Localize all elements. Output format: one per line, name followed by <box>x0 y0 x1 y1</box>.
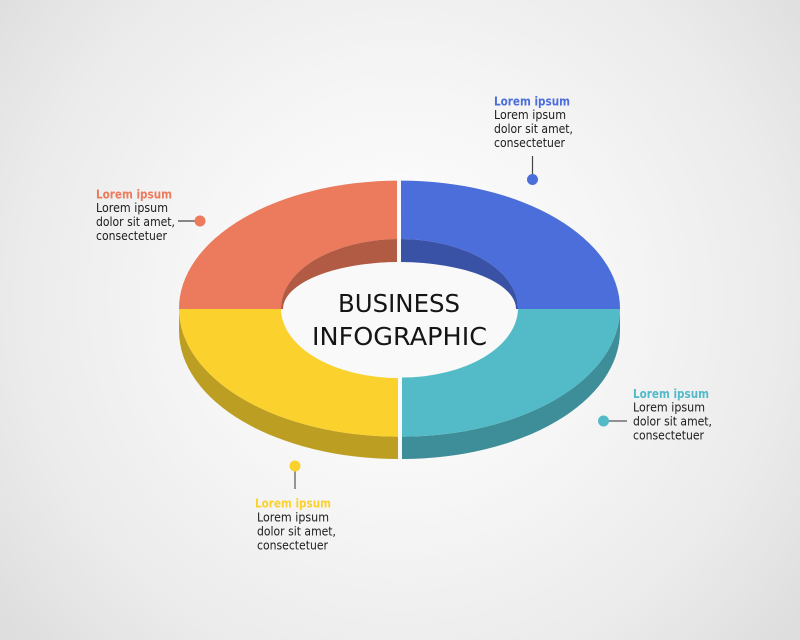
callout: orange: Lorem ipsum <box>96 188 172 202</box>
callout: teal: Lorem ipsum <box>633 400 705 414</box>
segment: teal <box>402 309 620 459</box>
callout: orange: consectetuer <box>96 229 167 243</box>
donut chart <box>179 181 620 459</box>
segment: orange <box>179 181 397 309</box>
callout: teal: consectetuer <box>633 428 704 442</box>
callout: yellow: Lorem ipsum <box>255 496 331 510</box>
hole <box>280 238 520 378</box>
title <box>312 289 487 351</box>
segment: yellow <box>179 309 398 459</box>
callout: orange: Lorem ipsum <box>96 201 168 215</box>
callout: yellow: consectetuer <box>257 538 328 552</box>
callout: teal: Lorem ipsum <box>633 387 709 401</box>
title: INFOGRAPHIC <box>312 322 487 351</box>
callout: orange <box>96 188 206 243</box>
callout: blue: dolor sit amet, <box>494 122 573 136</box>
callout: yellow <box>255 460 336 552</box>
callout: blue <box>494 94 573 185</box>
callout: blue: Lorem ipsum <box>494 94 570 108</box>
callout: blue: consectetuer <box>494 136 565 150</box>
callout: yellow: Lorem ipsum <box>257 510 329 524</box>
callout: blue: Lorem ipsum <box>494 108 566 122</box>
callout: orange: dolor sit amet, <box>96 215 175 229</box>
callout: teal: dolor sit amet, <box>633 414 712 428</box>
segment: blue <box>401 181 620 309</box>
callout: teal <box>598 387 712 442</box>
title: BUSINESS <box>338 289 460 318</box>
callout: yellow: dolor sit amet, <box>257 524 336 538</box>
